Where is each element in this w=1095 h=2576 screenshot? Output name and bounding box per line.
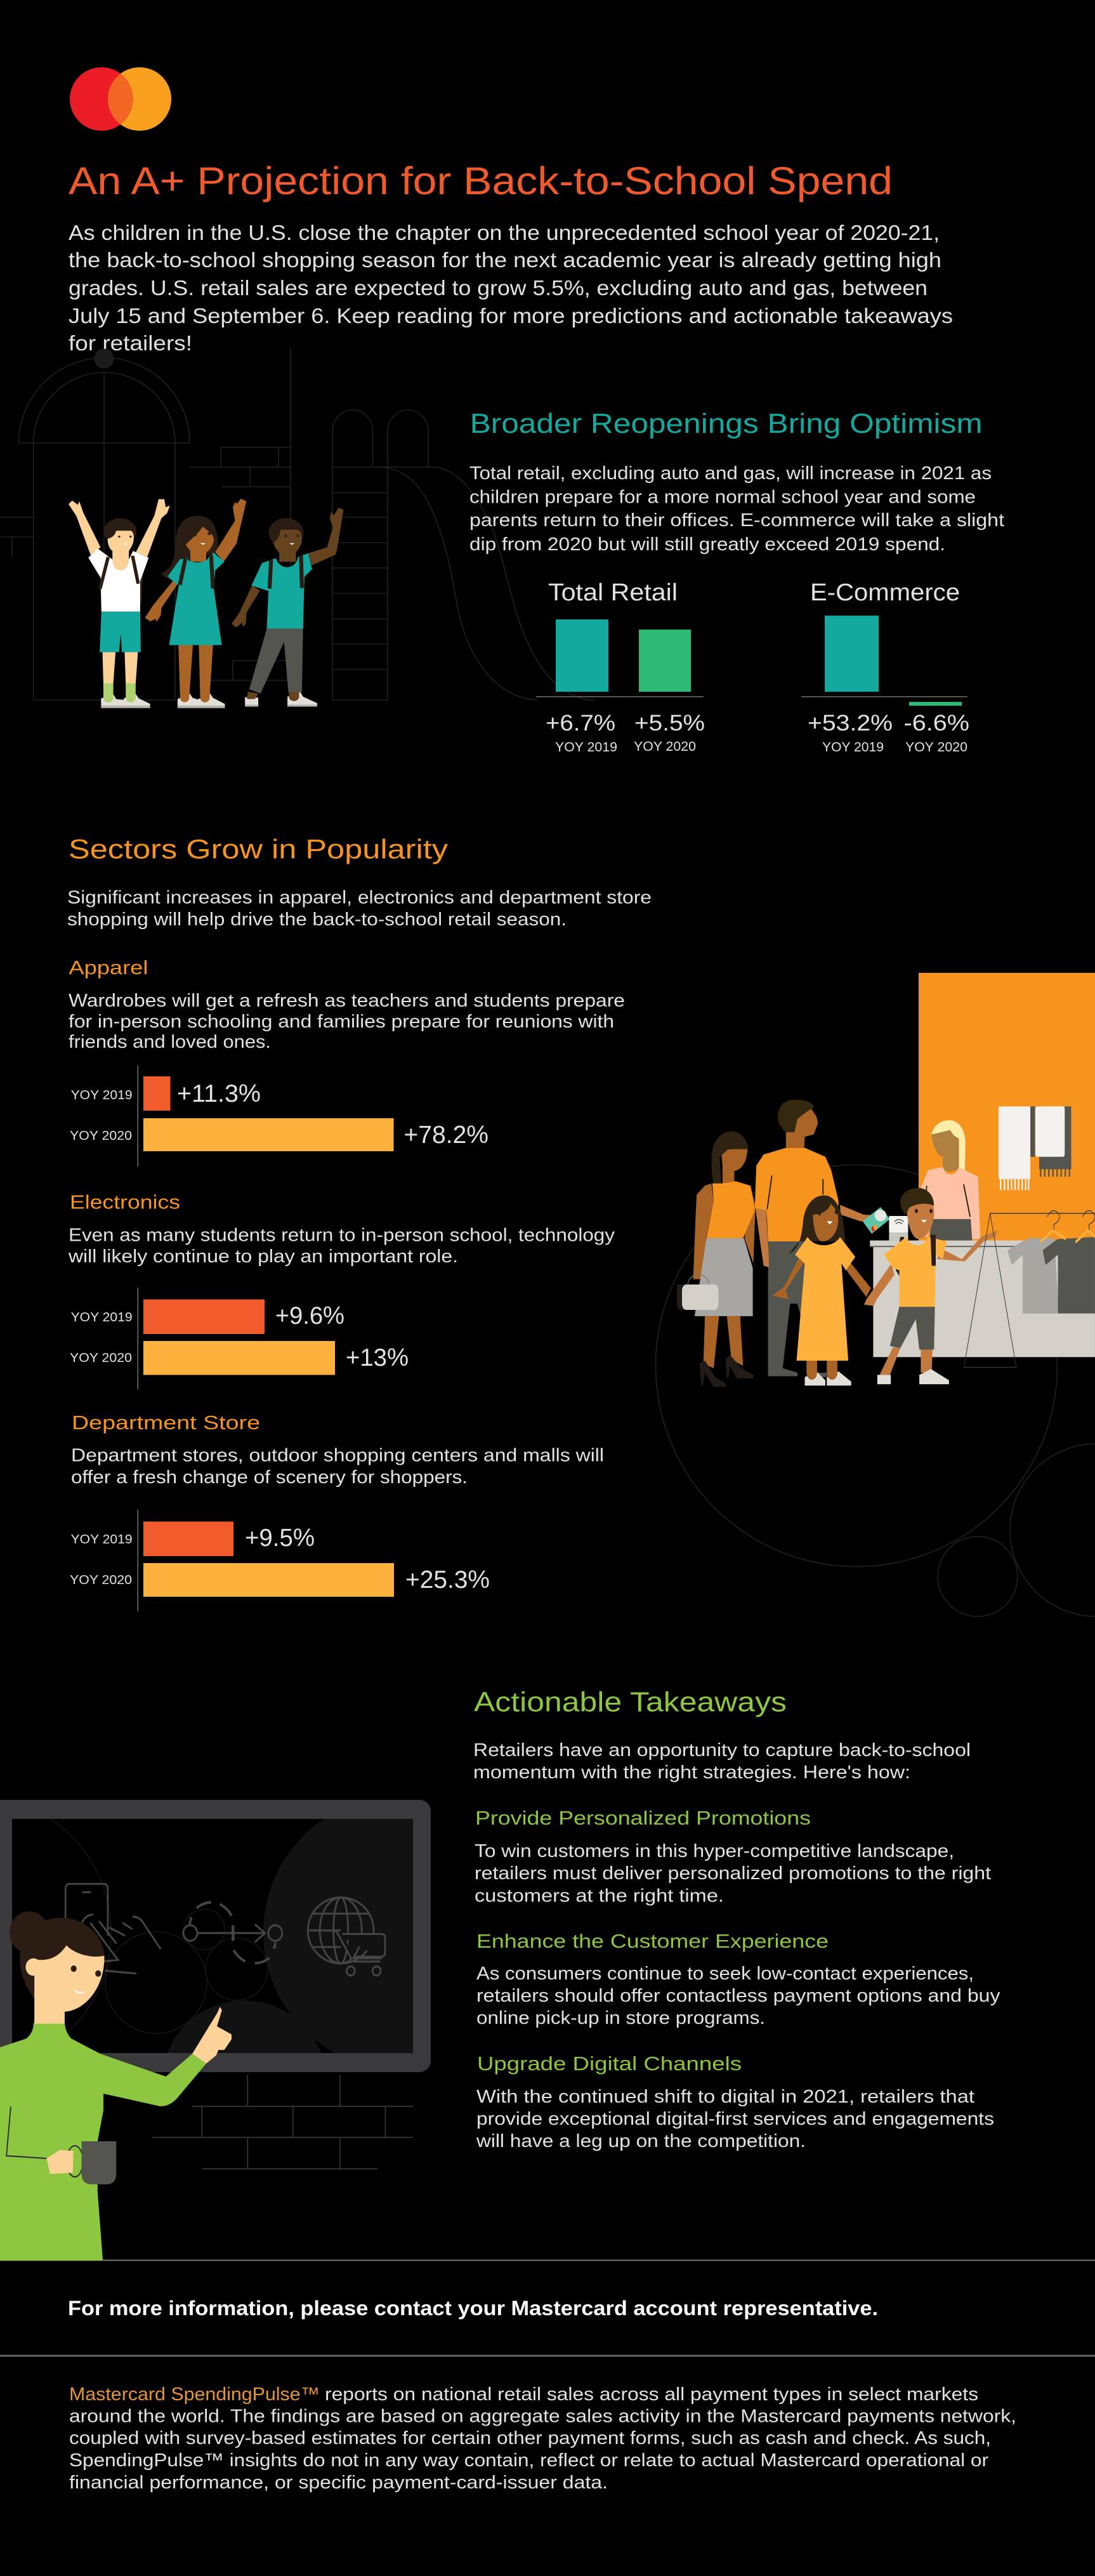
illustration: three children waving	[69, 499, 343, 708]
school building line art	[0, 348, 594, 701]
takeaway: digital channels: provide exceptional digital-first services and engagements	[476, 2109, 994, 2129]
takeaway: customer experience	[476, 1930, 1000, 2028]
shop assistant	[921, 1120, 980, 1241]
sub-section: apparel: for in-person schooling and families prepare for reunions with	[69, 1012, 614, 1032]
child in teal dress	[145, 499, 246, 708]
intro text: July 15 and September 6. Keep reading for more predictions and actionable takeaways	[69, 304, 953, 327]
bar chart: total retail: YOY 2019	[555, 740, 617, 755]
body text: dip from 2020 but will still greatly exceed 2019 spend.	[469, 534, 945, 555]
counter	[870, 1241, 1095, 1357]
screen icons	[65, 1884, 385, 1976]
takeaway: personalized promotions: To win customers in this hyper-competitive landscape,	[475, 1841, 954, 1861]
bar chart: e-commerce	[801, 579, 969, 755]
icon: Mastercard logo	[70, 67, 171, 131]
bar chart: total retail: Total Retail	[548, 579, 678, 606]
sweater	[0, 2023, 206, 2261]
body text: shopping will help drive the back-to-school retail season.	[67, 909, 567, 930]
bar chart: department store: +9.5%	[245, 1524, 315, 1552]
sub-section: department store: Department stores, outdoor shopping centers and malls will	[71, 1446, 604, 1466]
face and neck	[25, 1945, 104, 2024]
bar chart: total retail: YOY 2020	[634, 739, 696, 754]
sub-section: electronics: Even as many students return to in-person school, technology	[69, 1225, 615, 1246]
illustration: woman in green sweater pointing at screen	[0, 1912, 232, 2261]
disclaimer text: coupled with survey-based estimates for certain other payment forms, such as cash and check. As such,	[69, 2428, 991, 2448]
background circles behind shoppers	[656, 1165, 1095, 1616]
body text: Retailers have an opportunity to capture back-to-school	[473, 1740, 971, 1760]
takeaway: customer experience: retailers should offer contactless payment options and buy	[476, 1986, 1000, 2006]
body text: children prepare for a more normal school year and some	[469, 487, 976, 508]
disclaimer text: financial performance, or specific payment-card-issuer data.	[69, 2473, 608, 2493]
bar chart: department store: YOY 2019	[71, 1533, 133, 1547]
body text: parents return to their offices. E-commerce will take a slight	[469, 510, 1004, 531]
sub-section: apparel: friends and loved ones.	[69, 1032, 271, 1052]
sub-section: apparel: Wardrobes will get a refresh as teachers and students prepare	[69, 991, 625, 1011]
sub-section: electronics: will likely continue to play an important role.	[68, 1246, 458, 1267]
title: An A+ Projection for Back-to-School Spend	[69, 159, 893, 202]
brick wall lines	[152, 2075, 413, 2169]
girl in yellow dress	[773, 1196, 871, 1385]
bar chart: e-commerce: YOY 2020	[905, 740, 967, 755]
panel: broader reopenings	[469, 408, 1004, 755]
bar chart: apparel	[70, 1066, 488, 1166]
clothes rack with t-shirts	[964, 1211, 1095, 1367]
body text	[67, 887, 652, 930]
body text: momentum with the right strategies. Here's how:	[473, 1762, 910, 1783]
boy in yellow shirt	[864, 1188, 997, 1384]
bar chart: electronics: YOY 2020	[70, 1351, 132, 1365]
hair	[10, 1912, 104, 2000]
takeaway: digital channels: With the continued shift to digital in 2021, retailers that	[476, 2087, 974, 2107]
child in white shirt	[69, 499, 170, 708]
footer divider	[0, 2355, 1095, 2357]
takeaway: personalized promotions: Provide Personalized Promotions	[475, 1807, 811, 1829]
takeaway: personalized promotions: customers at the right time.	[475, 1886, 724, 1906]
disclaimer text: reports on national retail sales across all payment types in select markets	[325, 2384, 978, 2405]
bar chart: e-commerce: -6.6%	[903, 711, 969, 736]
woman with handbag	[677, 1132, 756, 1387]
bar chart: electronics: +13%	[346, 1344, 409, 1371]
takeaway: personalized promotions	[475, 1807, 991, 1906]
takeaway: customer experience: Enhance the Customer Experience	[476, 1930, 829, 1952]
bar chart: apparel: YOY 2020	[70, 1129, 132, 1143]
bar chart: e-commerce: +53.2%	[808, 711, 893, 736]
contactless card and reader	[863, 1207, 908, 1241]
takeaway: customer experience: As consumers continue to seek low-contact experiences,	[476, 1964, 974, 1984]
panel: sectors grow in popularity	[67, 834, 652, 1611]
bar chart: total retail: +6.7%	[546, 711, 615, 736]
bar chart: electronics	[70, 1288, 409, 1389]
intro text: the back-to-school shopping season for the next academic year is already getting high	[69, 248, 941, 272]
icon: phone and hand	[65, 1884, 161, 1974]
sub-section: apparel: Apparel	[69, 956, 148, 979]
sub-section: department store: offer a fresh change of scenery for shoppers.	[71, 1467, 468, 1488]
sub-section: electronics	[68, 1191, 615, 1267]
body text: Significant increases in apparel, electronics and department store	[67, 887, 652, 908]
sleeve fold line	[6, 2106, 46, 2158]
scarves on wall	[999, 1106, 1071, 1190]
heading: Actionable Takeaways	[474, 1687, 787, 1717]
child in teal shirt and grey trousers	[232, 508, 343, 706]
man in orange shirt	[755, 1100, 877, 1377]
heading: Broader Reopenings Bring Optimism	[470, 408, 983, 439]
takeaway: customer experience: online pick-up in store programs.	[476, 2008, 765, 2028]
sub-section: department store	[71, 1411, 604, 1488]
body text	[473, 1740, 971, 1783]
bar chart: electronics: YOY 2019	[71, 1311, 133, 1324]
bar chart: apparel: +78.2%	[403, 1121, 488, 1149]
illustration: store wall panel	[919, 973, 1095, 1241]
bar chart: department store	[70, 1510, 490, 1611]
sub-section: apparel	[69, 956, 625, 1052]
pointing hand	[192, 2007, 232, 2064]
icon: journey path	[183, 1902, 282, 1963]
bar chart: e-commerce: E-Commerce	[810, 579, 960, 606]
takeaway: digital channels: Upgrade Digital Channels	[477, 2052, 742, 2075]
body text	[469, 463, 1004, 555]
bar chart: apparel: +11.3%	[177, 1080, 261, 1107]
disclaimer text: Mastercard SpendingPulse™	[69, 2384, 320, 2405]
takeaway: digital channels: will have a leg up on the competition.	[476, 2131, 806, 2151]
heading: Sectors Grow in Popularity	[69, 834, 449, 864]
call to action: For more information, please contact your Mastercard account representative.	[68, 2297, 878, 2320]
coffee mug and hand	[46, 2141, 116, 2184]
bar chart: total retail: +5.5%	[634, 711, 705, 736]
intro text: grades. U.S. retail sales are expected to grow 5.5%, excluding auto and gas, between	[69, 276, 928, 300]
sub-section: department store: Department Store	[72, 1411, 260, 1434]
disclaimer text	[69, 2384, 1016, 2493]
sub-section: electronics: Electronics	[70, 1191, 180, 1213]
intro text	[69, 221, 953, 355]
disclaimer text: SpendingPulse™ insights do not in any way contain, reflect or relate to actual Mastercard operational or	[69, 2450, 988, 2471]
bar chart: department store: +25.3%	[405, 1566, 490, 1594]
bar chart: e-commerce: YOY 2019	[822, 740, 884, 755]
bar chart: department store: YOY 2020	[70, 1573, 132, 1587]
intro text: for retailers!	[69, 331, 192, 355]
footer divider	[0, 2259, 1095, 2261]
bar chart: apparel: YOY 2019	[71, 1088, 133, 1102]
bar chart: total retail	[536, 579, 705, 755]
takeaway: personalized promotions: retailers must deliver personalized promotions to the right	[475, 1863, 991, 1884]
panel: actionable takeaways	[473, 1687, 1000, 2151]
disclaimer text: around the world. The findings are based on aggregate sales activity in the Mastercard payments network,	[69, 2407, 1016, 2427]
icon: globe with shopping cart	[308, 1898, 385, 1976]
illustration: family shopping at store counter	[677, 1100, 1095, 1387]
intro text: As children in the U.S. close the chapter on the unprecedented school year of 2020-21,	[69, 221, 940, 244]
body text: Total retail, excluding auto and gas, will increase in 2021 as	[469, 463, 992, 484]
bar chart: electronics: +9.6%	[275, 1302, 344, 1330]
illustration: wall screen with retail icons	[0, 1795, 537, 2169]
takeaway: digital channels	[476, 2052, 994, 2151]
